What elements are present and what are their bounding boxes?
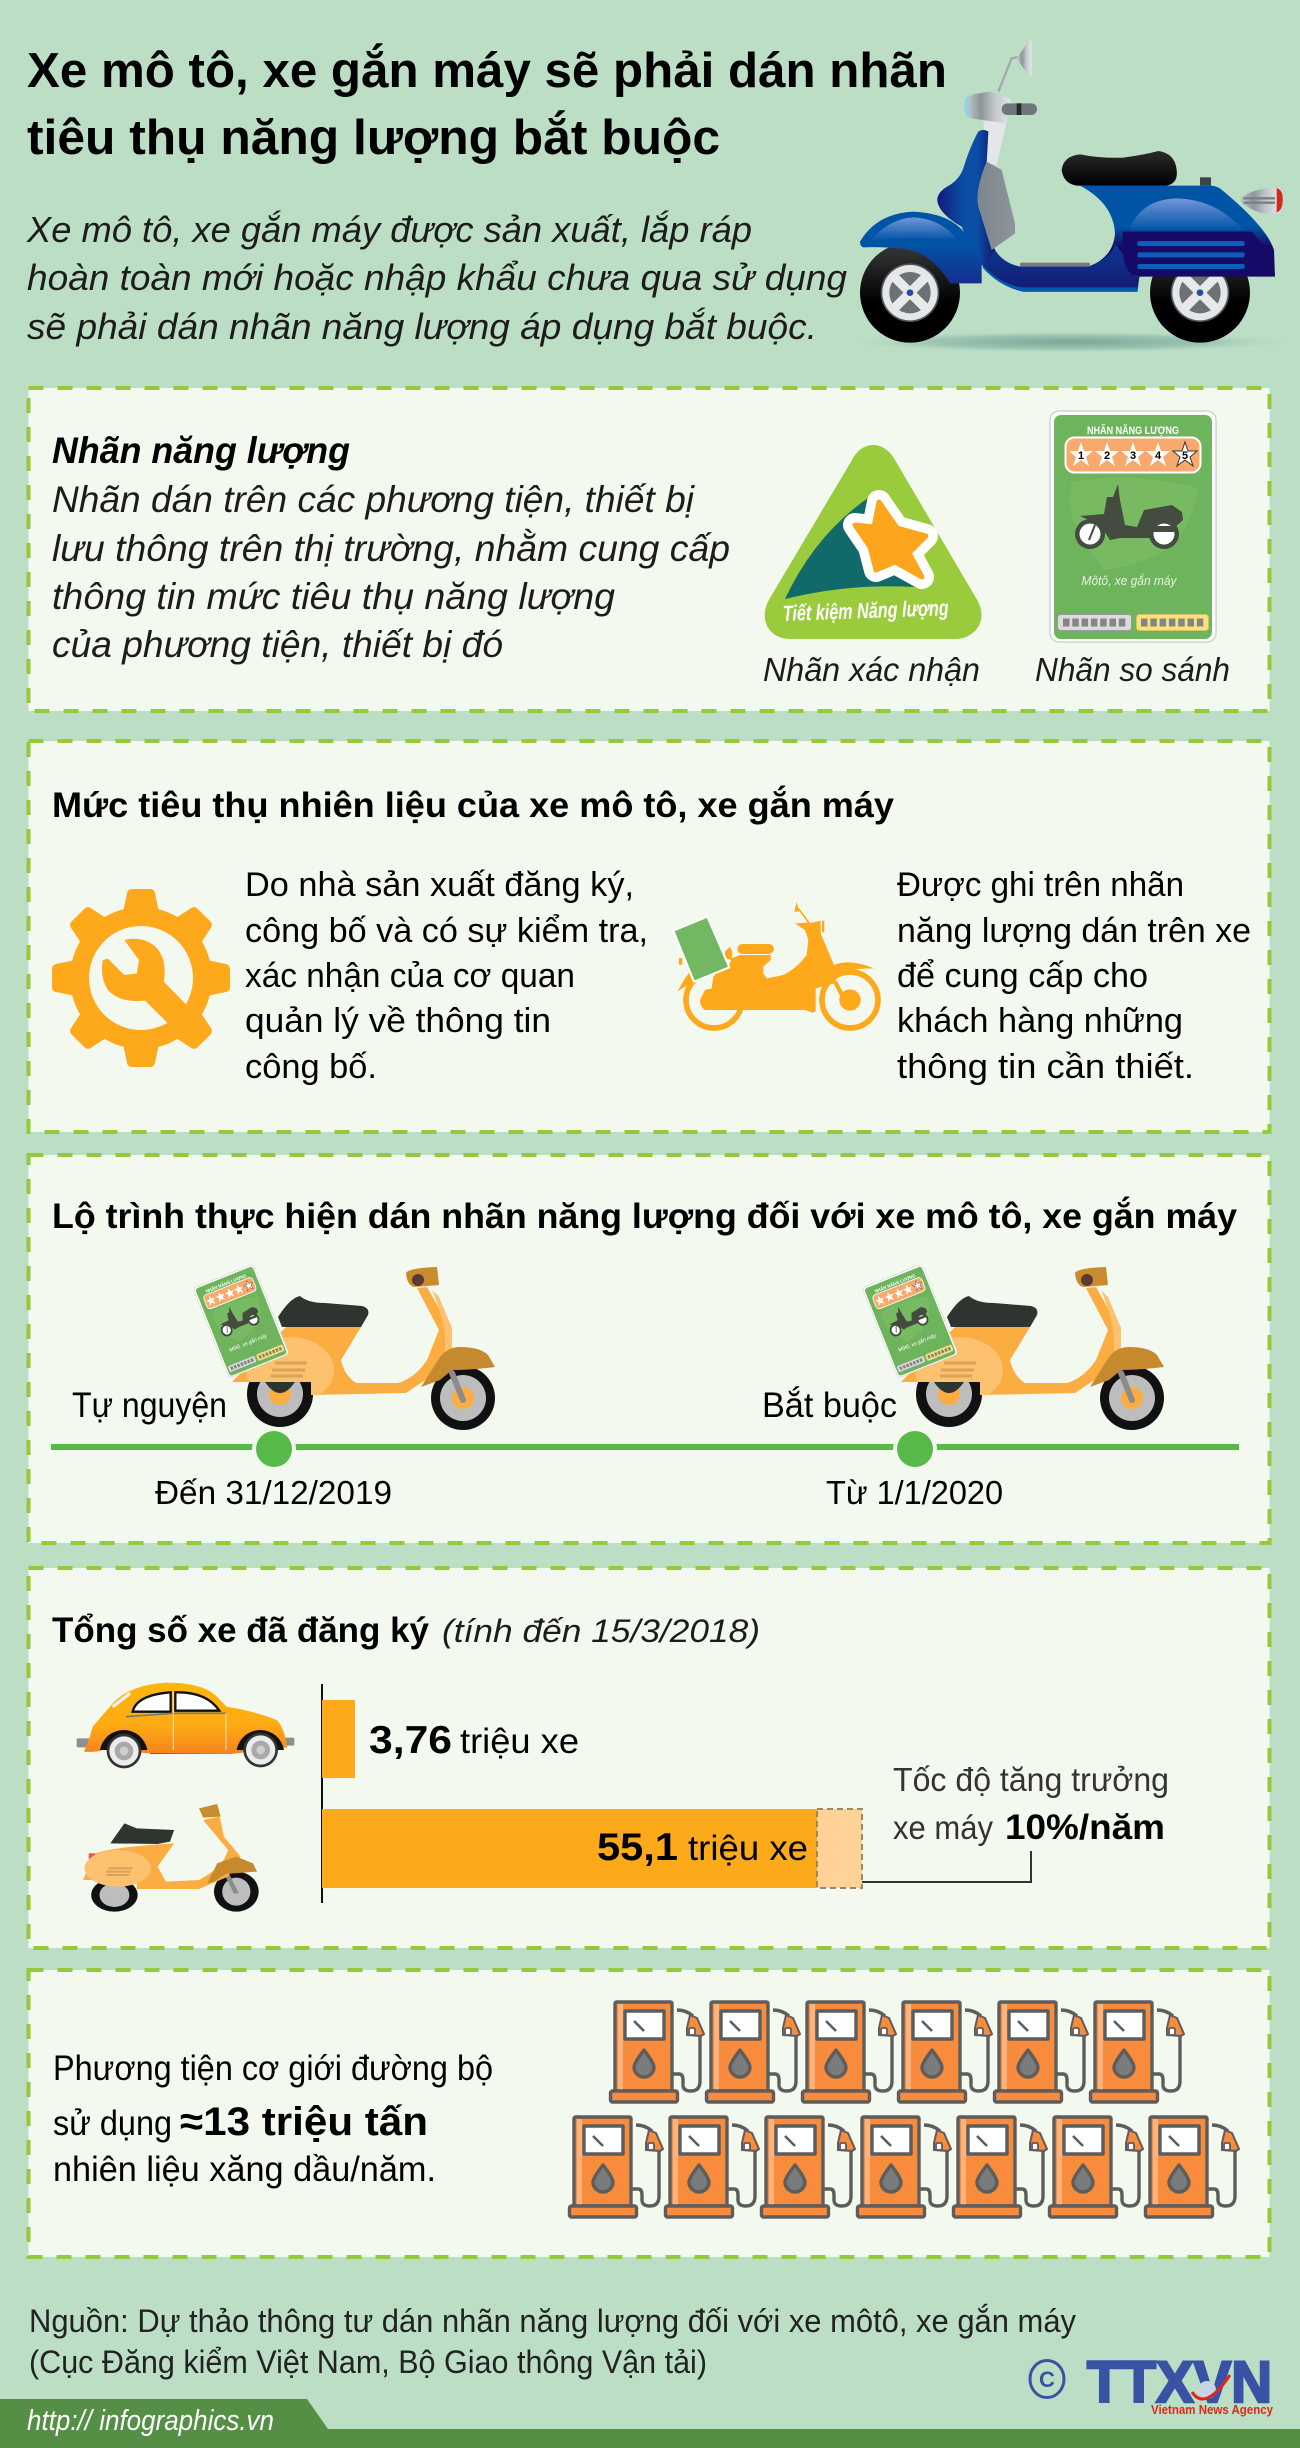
icon: yellow car <box>77 1683 294 1768</box>
text: declared by manufacturer <box>245 866 648 1086</box>
heading: (tính đến 15/3/2018) <box>442 1613 760 1649</box>
fuel text: ≈13 triệu tấn <box>180 2100 428 2144</box>
icon: blue scooter <box>837 40 1300 353</box>
definition text: thông tin mức tiêu thụ năng lượng <box>52 576 615 617</box>
date: from 1/1/2020: Từ 1/1/2020 <box>826 1474 1003 1511</box>
text: declared by manufacturer: Do nhà sản xuất đăng ký, <box>245 866 634 904</box>
value: 3,76 triệu xe <box>369 1719 579 1762</box>
value: 55,1 triệu xe <box>597 1826 808 1869</box>
icon: comparison label: 1 <box>1078 450 1084 462</box>
fuel text: sử dụng <box>53 2104 172 2143</box>
heading <box>52 1611 760 1650</box>
title <box>27 43 947 165</box>
value: 3,76 triệu xe: 3,76 <box>369 1719 452 1762</box>
definition text: lưu thông trên thị trường, nhằm cung cấp <box>52 528 730 569</box>
connector line <box>862 1851 1031 1882</box>
panel: registered vehicles <box>28 1568 1270 1948</box>
text: declared by manufacturer: xác nhận của cơ quan <box>245 957 575 995</box>
text: declared by manufacturer: công bố. <box>245 1048 377 1086</box>
subtitle: sẽ phải dán nhãn năng lượng áp dụng bắt buộc. <box>27 306 817 347</box>
icon: confirmation label triangle: Tiết kiệm Năng lượng <box>782 595 949 626</box>
callout: growth rate: xe máy <box>893 1809 993 1846</box>
caption: Nhãn xác nhận: Nhãn xác nhận <box>763 651 980 688</box>
caption: Nhãn so sánh: Nhãn so sánh <box>1035 651 1230 688</box>
panel: roadmap <box>28 1155 1270 1543</box>
date: until 31/12/2019: Đến 31/12/2019 <box>155 1474 392 1511</box>
icon row: fuel pumps bottom <box>570 2117 1239 2217</box>
timeline <box>51 1427 1239 1471</box>
text: printed on label: khách hàng những <box>897 1002 1183 1040</box>
heading: Tổng số xe đã đăng ký <box>52 1611 430 1650</box>
bar: growth increment <box>817 1809 862 1888</box>
text: declared by manufacturer: quản lý về thông tin <box>245 1002 551 1040</box>
panel: energy label <box>28 388 1270 711</box>
source <box>29 2303 1076 2380</box>
value: 55,1 triệu xe: 55,1 <box>597 1826 678 1869</box>
icon: comparison label: 3 <box>1130 450 1136 462</box>
value: 3,76 triệu xe: triệu xe <box>460 1722 579 1761</box>
icon: comparison label: NHÃN NĂNG LƯỢNG <box>1087 424 1179 437</box>
fuel text: nhiên liệu xăng dầu/năm. <box>53 2150 436 2189</box>
icon: mandatory scooter with label: Môtô, xe gắn máy <box>897 1332 937 1354</box>
icon: voluntary scooter with label: Môtô, xe gắn máy <box>228 1332 268 1354</box>
text: declared by manufacturer: công bố và có sự kiểm tra, <box>245 912 648 950</box>
callout: growth rate <box>893 1761 1169 1847</box>
callout: growth rate: Tốc độ tăng trưởng <box>893 1761 1169 1798</box>
panel: fuel use <box>28 1970 1270 2257</box>
footer band <box>0 2399 1300 2448</box>
icon: comparison label: 4 <box>1155 450 1162 462</box>
icon: orange motorbike with label <box>673 902 878 1028</box>
definition text <box>52 479 730 665</box>
definition text: của phương tiện, thiết bị đó <box>52 624 503 665</box>
icon: voluntary scooter with label: NHÃN NĂNG LƯỢNG <box>205 1272 248 1294</box>
heading: Lộ trình thực hiện dán nhãn năng lượng đối với xe mô tô, xe gắn máy <box>52 1196 1238 1236</box>
title: tiêu thụ năng lượng bắt buộc <box>27 110 720 165</box>
icon: voluntary scooter with label <box>193 1264 495 1430</box>
icon: mandatory scooter with label <box>862 1264 1164 1430</box>
text: printed on label <box>897 866 1251 1086</box>
icon: gear and wrench <box>52 889 230 1067</box>
icon: mandatory scooter with label: NHÃN NĂNG LƯỢNG <box>874 1272 917 1294</box>
subtitle: hoàn toàn mới hoặc nhập khẩu chưa qua sử dụng <box>27 257 847 298</box>
icon: comparison label <box>1050 411 1216 642</box>
text: printed on label: thông tin cần thiết. <box>897 1048 1194 1086</box>
source: (Cục Đăng kiểm Việt Nam, Bộ Giao thông Vận tải) <box>29 2344 707 2380</box>
definition text: Nhãn dán trên các phương tiện, thiết bị <box>52 479 696 520</box>
icon row: fuel pumps top <box>610 2002 1184 2102</box>
value: 55,1 triệu xe: triệu xe <box>688 1829 808 1868</box>
fuel text: Phương tiện cơ giới đường bộ <box>53 2049 493 2088</box>
icon: confirmation label triangle <box>765 445 981 639</box>
text: printed on label: để cung cấp cho <box>897 957 1148 995</box>
label: Bắt buộc: Bắt buộc <box>762 1386 897 1425</box>
text: printed on label: năng lượng dán trên xe <box>897 912 1251 950</box>
source: Nguồn: Dự thảo thông tư dán nhãn năng lượng đối với xe môtô, xe gắn máy <box>29 2303 1076 2339</box>
bar: cars <box>322 1700 355 1778</box>
logo: TTXVN: Vietnam News Agency <box>1151 2402 1274 2417</box>
subtitle: Xe mô tô, xe gắn máy được sản xuất, lắp ráp <box>26 209 752 250</box>
logo: TTXVN: C <box>1039 2367 1055 2392</box>
heading: Nhãn năng lượng: Nhãn năng lượng <box>52 430 350 471</box>
heading: Mức tiêu thụ nhiên liệu của xe mô tô, xe gắn máy <box>52 785 895 825</box>
panel: fuel consumption <box>28 741 1270 1132</box>
bar chart <box>321 1684 862 1903</box>
icon: comparison label: 5 <box>1182 450 1188 462</box>
icon: comparison label: 2 <box>1104 450 1110 462</box>
icon: small scooter <box>83 1804 259 1912</box>
text: printed on label: Được ghi trên nhãn <box>897 866 1184 904</box>
icon: comparison label: Môtô, xe gắn máy <box>1082 573 1178 588</box>
subtitle <box>26 209 847 347</box>
fuel text <box>53 2049 493 2189</box>
bar: motorbikes <box>322 1809 817 1888</box>
website url: http:// infographics.vn <box>27 2405 274 2437</box>
callout: growth rate: 10%/năm <box>1005 1808 1165 1847</box>
title: Xe mô tô, xe gắn máy sẽ phải dán nhãn <box>27 43 947 98</box>
label: Tự nguyện: Tự nguyện <box>72 1386 227 1425</box>
logo: TTXVN: TTXVN <box>1087 2350 1272 2415</box>
